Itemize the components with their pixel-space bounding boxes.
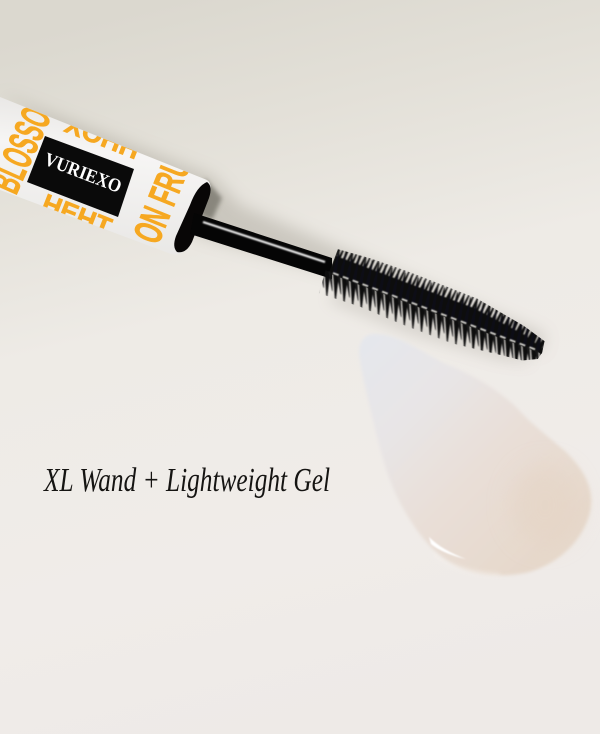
brand name: VURIEXO — [41, 149, 124, 198]
tube opening — [174, 182, 211, 252]
tube orange lettering — [0, 108, 188, 242]
twisted wire core — [333, 273, 535, 349]
mascara brush — [319, 249, 544, 360]
tube orange lettering: ON FRU — [126, 151, 199, 249]
gel highlight — [429, 537, 466, 559]
tube orange lettering: HEHT — [38, 188, 116, 242]
upper dense bristles — [332, 249, 544, 354]
gel swatch — [359, 334, 591, 575]
cast shadows — [0, 94, 545, 362]
wand stem — [190, 213, 332, 279]
tube orange lettering: XOHH — [61, 109, 144, 165]
black label — [27, 136, 134, 217]
lower spaced bristles — [319, 272, 542, 360]
mascara tube — [0, 97, 211, 255]
caption: XL Wand + Lightweight Gel — [43, 462, 330, 499]
product photo infographic — [0, 0, 600, 576]
